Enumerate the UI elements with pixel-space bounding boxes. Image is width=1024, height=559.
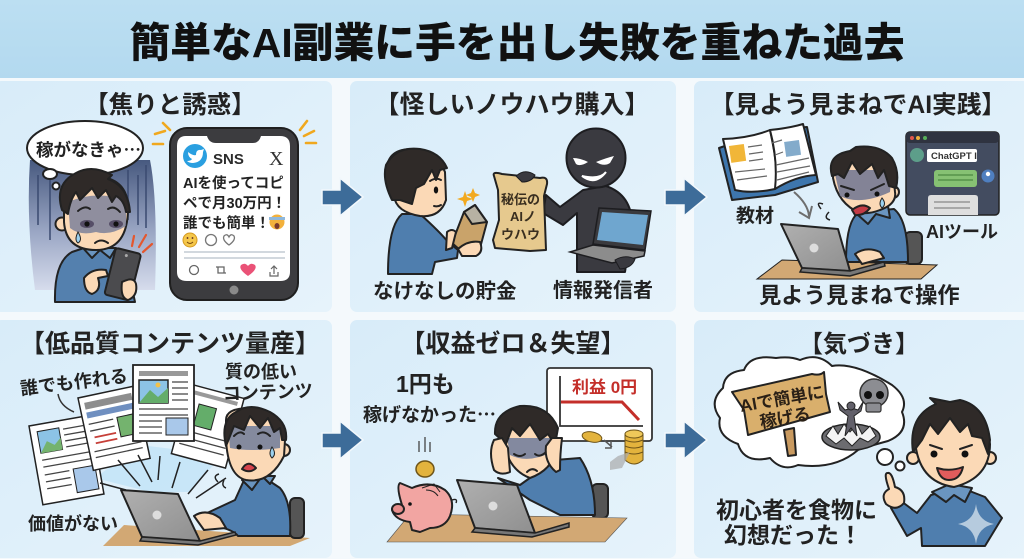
emoji: scream	[269, 214, 285, 230]
label: 稼げなかった…	[363, 400, 496, 427]
laptop	[457, 480, 569, 537]
signpost: AIで簡単に	[738, 381, 825, 416]
frustrated man at laptop	[781, 146, 922, 276]
signpost	[732, 372, 830, 456]
thought bubble	[27, 121, 143, 190]
skull	[860, 379, 888, 412]
thought bubble: 稼がなきゃ…	[36, 137, 141, 162]
profit chart	[547, 368, 652, 441]
signpost: 稼げる	[758, 404, 812, 432]
pointer	[58, 394, 74, 412]
coins	[581, 430, 643, 470]
thought cloud	[715, 357, 904, 470]
heading: 【低品質コンテンツ量産】	[20, 330, 320, 358]
secret scroll: 秘伝の	[501, 192, 540, 207]
label: 幻想だった！	[724, 522, 862, 548]
post reactions	[183, 233, 234, 247]
large smartphone with SNS post	[170, 128, 298, 300]
laptop	[121, 490, 236, 545]
title: 簡単なAI副業に手を出し失敗を重ねた過去	[130, 20, 904, 66]
label: AIツール	[926, 222, 998, 242]
arrow: 4 to 5	[322, 421, 363, 459]
label: 教材	[736, 205, 774, 227]
arrow: book to laptop	[794, 192, 812, 218]
secret scroll: ウハウ	[501, 227, 540, 242]
large smartphone with SNS post: X	[269, 148, 284, 170]
label: 情報発信者	[553, 279, 653, 302]
ChatGPT window	[906, 132, 999, 215]
large smartphone with SNS post: SNS	[213, 151, 244, 168]
label: 価値がない	[28, 513, 118, 534]
falling coin	[416, 437, 434, 477]
light rays	[100, 455, 226, 498]
orange alert rays	[153, 121, 316, 144]
label: 誰でも作れる	[19, 366, 129, 399]
piggy bank	[392, 483, 456, 532]
phone in hand	[104, 248, 141, 301]
panel: 気づき	[694, 320, 1024, 558]
arrow: 1 to 2	[322, 178, 363, 216]
panel: 焦りと誘惑	[0, 81, 332, 312]
worried man with smartphone	[55, 169, 152, 302]
heading: 【収益ゼロ＆失望】	[400, 329, 626, 358]
label: 質の低い	[225, 362, 297, 382]
savings envelope	[452, 205, 487, 250]
open textbook	[719, 124, 818, 200]
shadow info seller	[493, 128, 651, 272]
label: 初心者を食物に	[716, 497, 877, 523]
secret scroll: AIノ	[510, 209, 536, 224]
watermark sparkle	[958, 504, 994, 544]
desk	[103, 525, 310, 546]
arrow: 5 to 6	[665, 421, 707, 459]
label: 見よう見まねで操作	[759, 283, 960, 308]
document middle	[78, 386, 150, 470]
panel: 低品質コンテンツ量産	[0, 320, 332, 558]
despairing man	[491, 406, 608, 518]
profit chart: 利益 0円	[572, 378, 637, 397]
heading: 【怪しいノウハウ購入】	[374, 91, 650, 119]
post action icons	[190, 264, 278, 276]
heading: 【気づき】	[799, 331, 919, 358]
large smartphone with SNS post: AIを使ってコピ	[183, 174, 284, 192]
document right	[171, 384, 244, 468]
panel: 怪しいノウハウ購入	[350, 81, 676, 312]
label: なけなしの貯金	[373, 280, 517, 303]
secret scroll	[493, 172, 547, 251]
document left	[29, 415, 104, 505]
rain background	[29, 160, 156, 290]
trap with figure	[822, 402, 880, 450]
desk	[387, 514, 627, 542]
document top	[133, 365, 194, 441]
label: 1円も	[396, 371, 455, 397]
heading: 【焦りと誘惑】	[84, 91, 256, 119]
panel: 見よう見まねでAI実践	[694, 81, 1024, 312]
laptop	[570, 208, 651, 269]
large smartphone with SNS post: 誰でも簡単！	[183, 214, 270, 232]
laptop	[781, 224, 885, 276]
happy man pointing	[884, 398, 1002, 546]
heading: 【見よう見まねでAI実践】	[710, 91, 1006, 119]
desk	[757, 260, 937, 279]
ChatGPT window: ChatGPT I	[931, 151, 977, 162]
arrow: 2 to 3	[665, 178, 707, 216]
large smartphone with SNS post: ペで月30万円！	[183, 196, 286, 212]
panel: 収益ゼロ&失望	[350, 320, 676, 558]
man with savings envelope	[385, 149, 487, 274]
label: コンテンツ	[222, 381, 313, 404]
panicked man typing	[194, 407, 304, 538]
glow from laptop	[95, 445, 222, 492]
header band	[0, 0, 1024, 78]
